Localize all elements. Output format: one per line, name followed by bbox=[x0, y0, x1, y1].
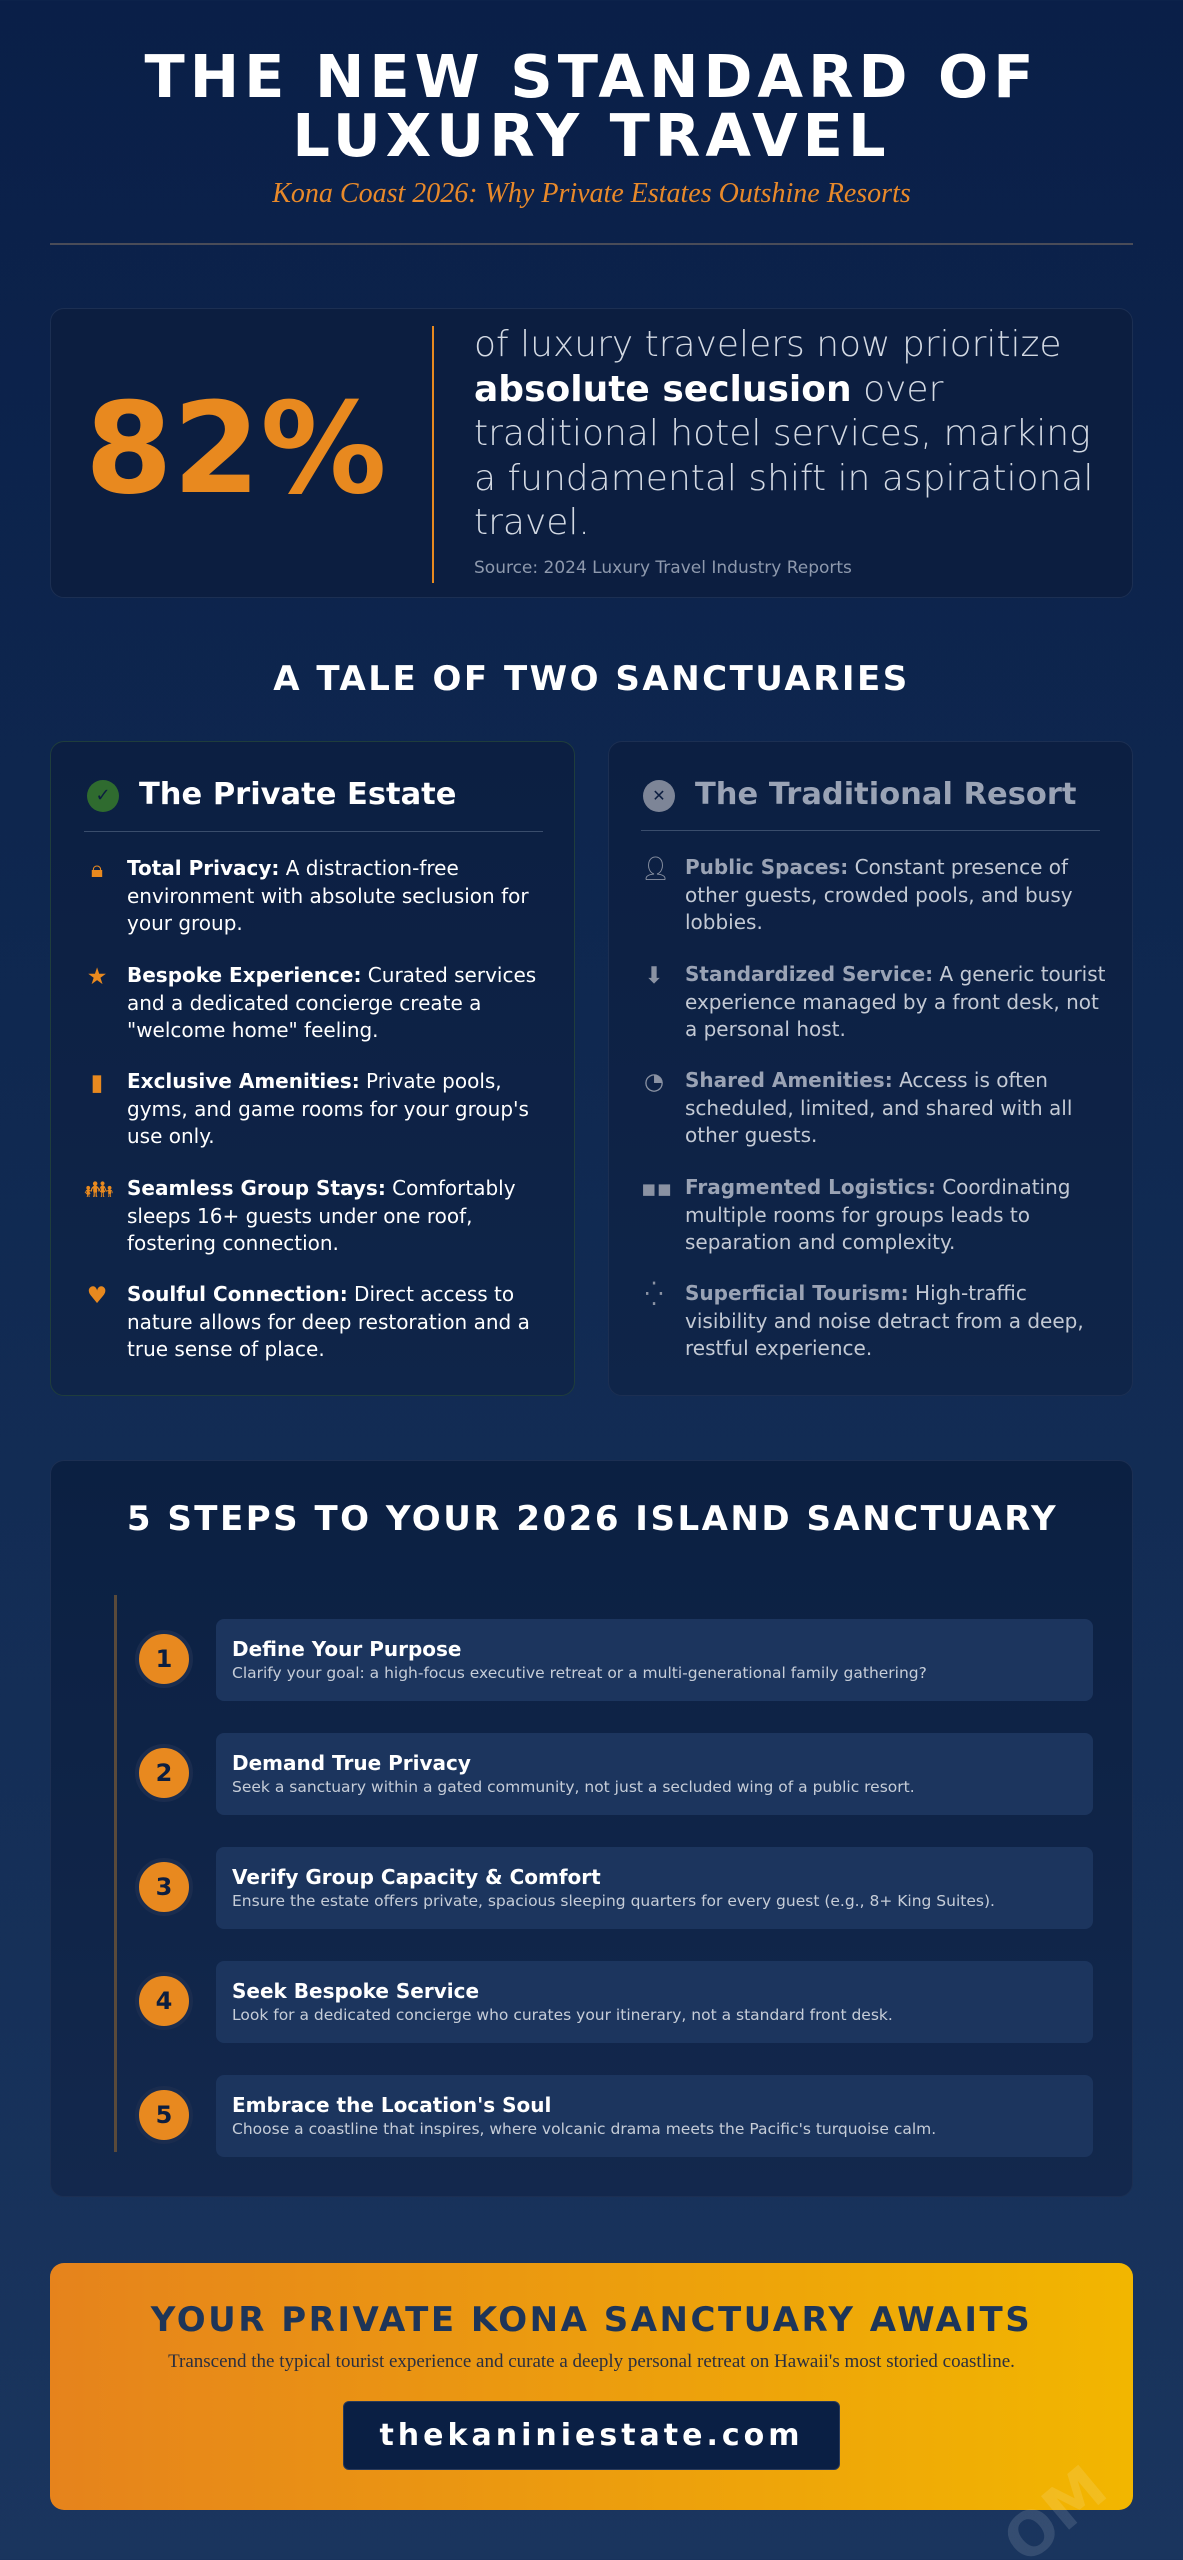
panel: 5 steps bbox=[50, 1460, 1133, 2197]
step 2: 2 bbox=[156, 1759, 172, 1787]
stat text: of luxury travelers now prioritize absolute seclusion over traditional hotel services, marking a fundamental shift in aspirational travel. bbox=[474, 324, 1093, 543]
item: privacy: 🔒︎ bbox=[91, 857, 103, 883]
item: public: Public Spaces: Constant presence of other guests, crowded pools, and busy lobbies. bbox=[685, 855, 1073, 934]
section heading: tale of two: A TALE OF TWO SANCTUARIES bbox=[273, 659, 910, 699]
item: amenities: Exclusive Amenities: Private pools, gyms, and game rooms for your group's use only. bbox=[127, 1069, 529, 1148]
item: superficial: Superficial Tourism: High-traffic visibility and noise detract from a deep, restful experience. bbox=[685, 1281, 1084, 1360]
cta text: Transcend the typical tourist experience and curate a deeply personal retreat on Hawaii's most storied coastline. bbox=[168, 2351, 1015, 2372]
step 4: 4 bbox=[156, 1987, 172, 2015]
item: superficial: ⁛ bbox=[645, 1282, 663, 1308]
heading: 5 steps: 5 STEPS TO YOUR 2026 ISLAND SANCTUARY bbox=[127, 1499, 1058, 1539]
item: standardized: Standardized Service: A generic tourist experience managed by a front desk, not a personal host. bbox=[685, 962, 1106, 1041]
title bbox=[144, 42, 1038, 170]
panel: traditional resort bbox=[608, 741, 1133, 1396]
cta button bbox=[343, 2401, 840, 2470]
icon: check bbox=[87, 780, 119, 812]
item: soulful: ♥ bbox=[87, 1283, 107, 1309]
step 3: Verify Group Capacity & Comfort bbox=[232, 1865, 601, 1889]
heading: traditional resort: The Traditional Resort bbox=[695, 777, 1076, 812]
step 4: Look for a dedicated concierge who curates your itinerary, not a standard front desk. bbox=[232, 2006, 893, 2024]
step 5: Choose a coastline that inspires, where volcanic drama meets the Pacific's turquoise calm. bbox=[232, 2120, 936, 2138]
item: soulful: Soulful Connection: Direct access to nature allows for deep restoration and a true sense of place. bbox=[127, 1282, 530, 1361]
item: shared: Shared Amenities: Access is often scheduled, limited, and shared with all other guests. bbox=[685, 1068, 1072, 1147]
cta heading: YOUR PRIVATE KONA SANCTUARY AWAITS bbox=[151, 2300, 1032, 2340]
timeline line bbox=[114, 1595, 117, 2152]
stat number: 82% bbox=[85, 375, 387, 522]
step 1: 1 bbox=[156, 1645, 172, 1673]
item: standardized: ⬇︎ bbox=[644, 963, 664, 989]
item: shared: ◔ bbox=[644, 1069, 664, 1095]
source: Source: 2024 Luxury Travel Industry Reports bbox=[474, 558, 852, 578]
step 4 bbox=[135, 1961, 1093, 2043]
icon: x bbox=[643, 780, 675, 812]
item: bespoke: ★ bbox=[87, 964, 107, 990]
cta button: thekaniniestate.com bbox=[379, 2418, 804, 2453]
item: public: 👤︎ bbox=[641, 856, 670, 882]
item: bespoke: Bespoke Experience: Curated services and a dedicated concierge create a "welcome home" feeling. bbox=[127, 963, 536, 1042]
step 1: Define Your Purpose bbox=[232, 1637, 462, 1661]
item: group: 👪︎ bbox=[84, 1177, 113, 1203]
stat card bbox=[50, 308, 1133, 598]
icon: x: ✕ bbox=[652, 786, 666, 805]
item: amenities: ▮ bbox=[91, 1070, 103, 1096]
item: fragmented: ▪▪ bbox=[641, 1176, 672, 1202]
step 3: Ensure the estate offers private, spacious sleeping quarters for every guest (e.g., 8+ King Suites). bbox=[232, 1892, 995, 1910]
step 5 bbox=[139, 2075, 1093, 2157]
step 3 bbox=[135, 1847, 1093, 1929]
heading: private estate: The Private Estate bbox=[139, 777, 456, 812]
step 5: Embrace the Location's Soul bbox=[232, 2093, 551, 2117]
icon: check: ✓ bbox=[95, 785, 111, 806]
step 1: Clarify your goal: a high-focus executive retreat or a multi-generational family gathering? bbox=[232, 1664, 927, 1682]
title: THE NEW STANDARD OF bbox=[144, 42, 1038, 111]
cta banner bbox=[50, 2263, 1133, 2510]
item: privacy: Total Privacy: A distraction-free environment with absolute seclusion for your group. bbox=[127, 856, 529, 935]
step 2 bbox=[135, 1733, 1093, 1815]
panel: private estate bbox=[50, 741, 575, 1396]
step 2: Demand True Privacy bbox=[232, 1751, 471, 1775]
step 1 bbox=[135, 1619, 1093, 1701]
step 4: Seek Bespoke Service bbox=[232, 1979, 479, 2003]
subtitle: Kona Coast 2026: Why Private Estates Outshine Resorts bbox=[272, 178, 911, 209]
title: LUXURY TRAVEL bbox=[292, 101, 891, 170]
step 5: 5 bbox=[156, 2101, 172, 2129]
step 3: 3 bbox=[156, 1873, 172, 1901]
step 2: Seek a sanctuary within a gated community, not just a secluded wing of a public resort. bbox=[232, 1778, 915, 1796]
item: group: Seamless Group Stays: Comfortably sleeps 16+ guests under one roof, fostering connection. bbox=[127, 1176, 516, 1255]
item: fragmented: Fragmented Logistics: Coordinating multiple rooms for groups leads to separation and complexity. bbox=[685, 1175, 1070, 1254]
